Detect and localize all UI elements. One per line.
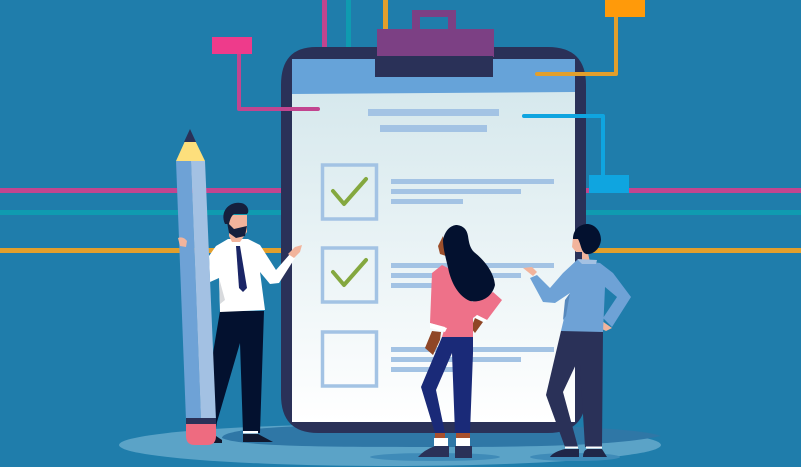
woman legs [421,337,473,433]
blue connector with box [524,116,629,193]
man tie [236,246,247,292]
man in blue sweater [523,224,631,457]
woman face [438,236,446,256]
man with tie [209,203,302,443]
paper header band [292,59,575,94]
hand on pencil [178,237,187,247]
man shoes [243,434,273,442]
pink connector with box [212,37,318,109]
clipboard board [281,47,586,433]
woman arms skin [425,318,483,355]
title lines [368,109,499,132]
checklist item 2 [322,248,554,302]
man shirt [209,239,295,312]
man hair and beard [223,203,248,238]
blue man hand [523,267,537,276]
blue man shoes [550,449,607,457]
man head [229,215,247,242]
pencil [176,129,216,445]
clipboard [281,10,586,433]
ground ellipses [119,424,661,466]
checklist item 1 [322,165,554,219]
blue man collar [577,259,597,264]
blue man face [572,237,590,262]
horizontal connector lines [0,188,801,253]
paper sheet [292,59,575,422]
orange connector with box [537,0,645,74]
clip [375,10,494,77]
man hand [288,245,302,258]
woman hair [443,225,495,301]
woman socks [434,438,470,446]
blue man legs [546,331,603,447]
woman top [430,265,502,337]
woman cuffs [430,315,487,332]
blue man sweater [530,260,631,332]
woman shoes [418,446,472,458]
woman [418,225,502,458]
man legs [212,311,264,440]
blue man hair [573,224,601,254]
vertical connector lines from top [322,0,388,50]
checklist item 3 [322,332,554,386]
woman ankles [435,433,470,438]
